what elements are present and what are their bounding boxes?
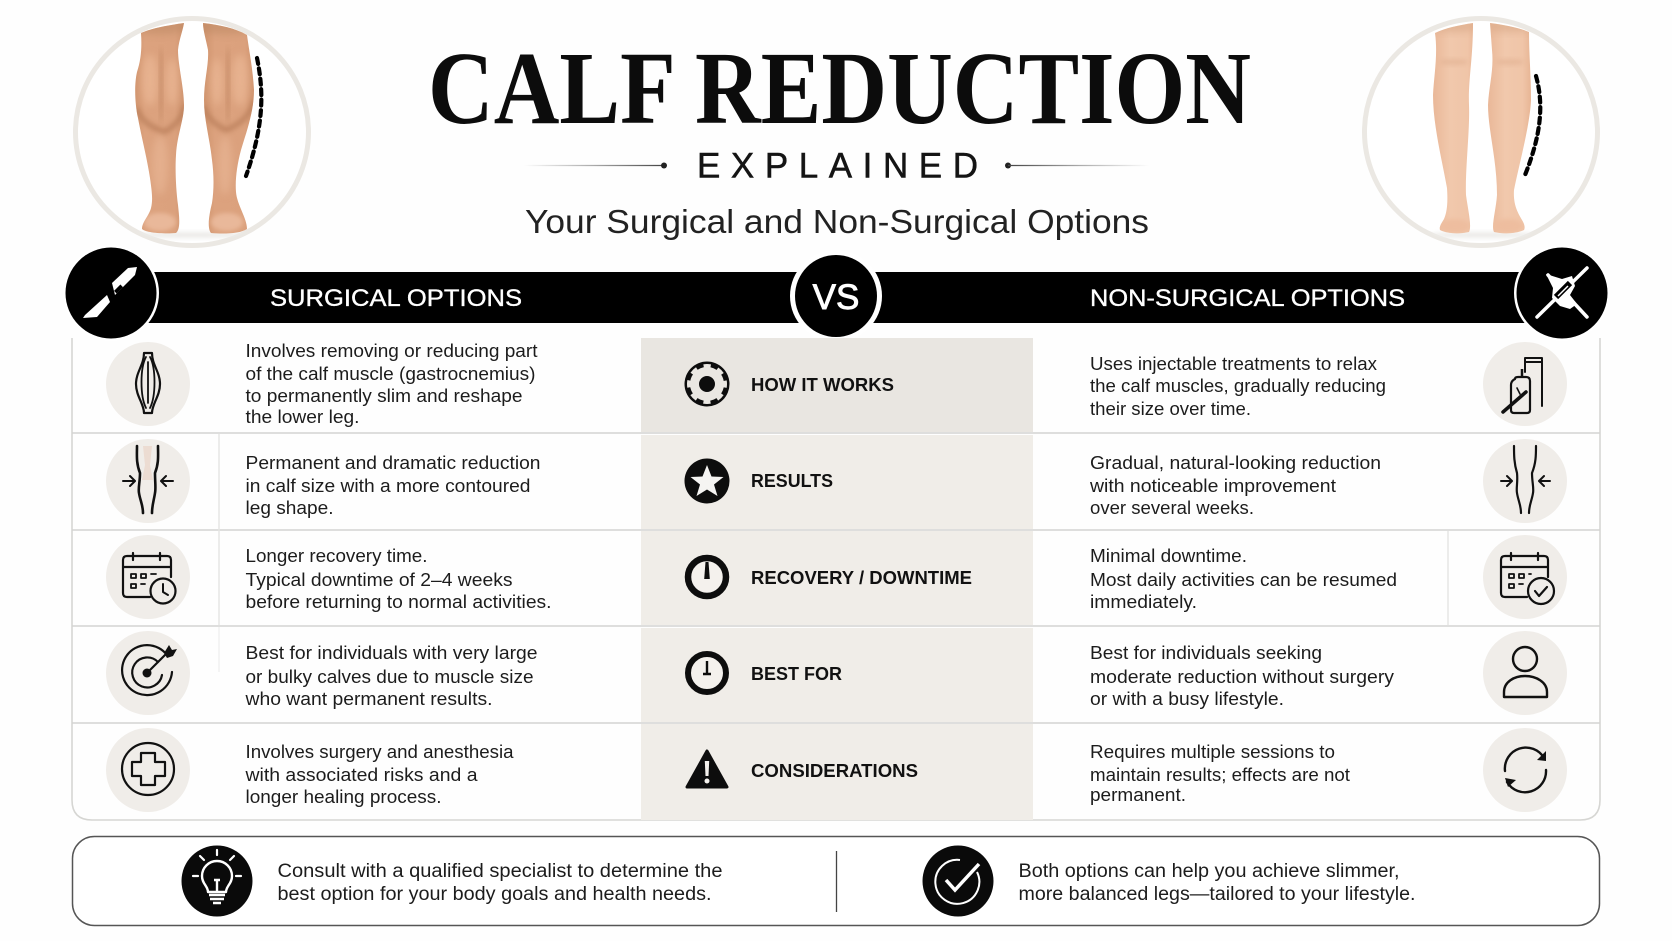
photo: slim calves after: [1364, 18, 1598, 246]
text: both options: more balanced legs—tailored to your lifestyle.: [1018, 884, 1416, 905]
icon: person: [1483, 631, 1567, 715]
icon: gear: [684, 362, 730, 406]
text: non-surgical how it works: [1090, 354, 1386, 419]
icon: check mark: [922, 846, 994, 916]
text: non-surgical how it works: Uses injectable treatments to relax: [1090, 354, 1377, 374]
badge: VS: [790, 250, 882, 342]
tagline: Your Surgical and Non-Surgical Options: [525, 203, 1149, 240]
text: surgical how it works: the lower leg.: [246, 407, 360, 427]
panel: comparison table: [72, 338, 1600, 820]
text: surgical results: Permanent and dramatic reduction: [246, 453, 540, 473]
icon: calendar with clock: [106, 535, 190, 619]
icon: slimmer legs arrows: [106, 439, 190, 523]
badge: VS: VS: [813, 278, 859, 317]
text: non-surgical results: over several weeks.: [1090, 498, 1254, 518]
text: surgical considerations: with associated risks and a: [244, 765, 479, 785]
text: consult specialist: best option for your body goals and health needs.: [278, 884, 712, 905]
text: both options: Both options can help you achieve slimmer,: [1018, 861, 1400, 882]
text: surgical recovery: [246, 546, 552, 612]
text: surgical recovery: Typical downtime of 2–4 weeks: [246, 570, 512, 590]
text: both options: [1018, 861, 1416, 905]
text: non-surgical best for: Best for individuals seeking: [1090, 643, 1322, 663]
heading: surgical options: SURGICAL OPTIONS: [270, 285, 522, 312]
text: non-surgical considerations: Requires multiple sessions to: [1090, 742, 1335, 762]
text: surgical considerations: Involves surgery and anesthesia: [246, 742, 515, 762]
text: surgical how it works: of the calf muscle (gastrocnemius): [246, 364, 536, 384]
text: non-surgical best for: moderate reduction without surgery: [1090, 667, 1394, 687]
left leg: [135, 23, 184, 234]
icon: slim legs arrows: [1483, 439, 1567, 523]
text: surgical results: leg shape.: [246, 498, 334, 518]
right leg: [203, 23, 254, 234]
icon: muscle: [106, 342, 190, 426]
icon: injectable bottles: [1483, 342, 1567, 426]
text: non-surgical recovery: immediately.: [1090, 592, 1197, 612]
panel: central criteria column: [641, 338, 1033, 820]
text: surgical recovery: Longer recovery time.: [246, 546, 428, 566]
text: non-surgical results: with noticeable improvement: [1089, 476, 1336, 496]
text: non-surgical considerations: maintain results; effects are not: [1090, 765, 1350, 785]
text: non-surgical considerations: permanent.: [1090, 785, 1186, 805]
text: surgical results: in calf size with a more contoured: [246, 476, 530, 496]
text: surgical best for: Best for individuals with very large: [246, 643, 538, 663]
text: non-surgical recovery: [1090, 546, 1397, 612]
text: non-surgical how it works: their size over time.: [1090, 399, 1251, 419]
text: surgical results: [246, 453, 540, 518]
header bar: [63, 245, 1610, 342]
icon: clock: [688, 654, 726, 692]
icon: light bulb: [182, 846, 252, 916]
text: surgical considerations: longer healing process.: [246, 787, 442, 807]
subtitle: explained with ornaments: EXPLAINED: [697, 146, 978, 186]
text: surgical best for: who want permanent results.: [244, 689, 492, 709]
icon: warning triangle: [687, 751, 727, 787]
text: surgical best for: or bulky calves due to muscle size: [246, 667, 534, 687]
text: non-surgical considerations: [1090, 742, 1350, 805]
text: surgical how it works: to permanently slim and reshape: [246, 386, 522, 406]
text: non-surgical how it works: the calf muscles, gradually reducing: [1090, 376, 1386, 396]
text: consult specialist: [278, 861, 722, 905]
text: non-surgical best for: [1090, 643, 1394, 709]
label: recovery / downtime: RECOVERY / DOWNTIME: [751, 568, 972, 588]
icon: repeat cycle: [1483, 728, 1567, 812]
icon: star: [684, 458, 730, 504]
icon: timer: [688, 558, 726, 596]
text: surgical best for: [244, 643, 538, 709]
label: how it works: HOW IT WORKS: [751, 375, 894, 395]
icon: scalpel: [63, 245, 159, 341]
photo: muscular calves before: [76, 18, 308, 246]
text: consult specialist: Consult with a qualified specialist to determine the: [278, 861, 722, 882]
text: non-surgical best for: or with a busy lifestyle.: [1090, 689, 1284, 709]
text: non-surgical recovery: Most daily activities can be resumed: [1090, 570, 1397, 590]
text: surgical recovery: before returning to normal activities.: [246, 592, 552, 612]
label: results: RESULTS: [751, 471, 833, 491]
icon: medical cross: [106, 728, 190, 812]
text: non-surgical recovery: Minimal downtime.: [1090, 546, 1247, 566]
label: considerations: CONSIDERATIONS: [751, 761, 918, 781]
subtitle: explained with ornaments: [523, 146, 1150, 186]
text: surgical how it works: [246, 341, 538, 427]
label: best for: BEST FOR: [751, 664, 842, 684]
heading: non-surgical options: NON-SURGICAL OPTIONS: [1090, 285, 1405, 312]
icon: target: [106, 631, 190, 715]
text: non-surgical results: Gradual, natural-looking reduction: [1090, 453, 1381, 473]
icon: crossed syringe: [1514, 245, 1610, 341]
text: surgical how it works: Involves removing or reducing part: [246, 341, 538, 361]
text: non-surgical results: [1089, 453, 1381, 518]
panel: bottom takeaway: [72, 836, 1600, 926]
icon: calendar with check: [1483, 535, 1567, 619]
title: CALF REDUCTION: [428, 31, 1251, 146]
text: surgical considerations: [244, 742, 515, 807]
